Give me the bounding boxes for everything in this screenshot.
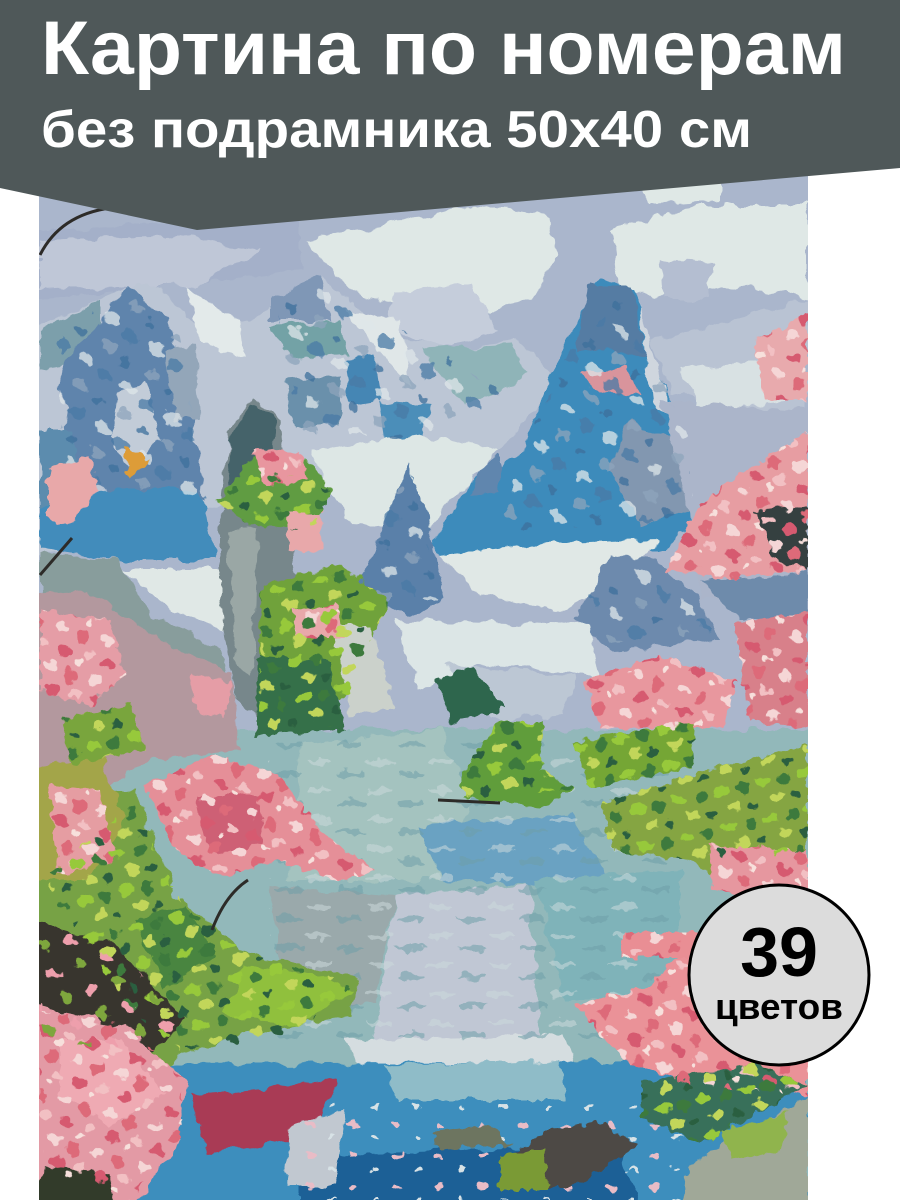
main right peak: [432, 278, 700, 555]
branch strokes: [40, 208, 500, 930]
badge: 39 colours: цветов: [715, 986, 843, 1027]
distant mountains: [30, 275, 560, 560]
rocks in the water: [430, 1122, 638, 1190]
badge: 39 colours: 39: [740, 913, 818, 991]
painting: mountain lake with blossoms: [30, 176, 820, 1200]
blossom brushwork texture: [40, 315, 808, 1200]
left bank foliage: [30, 590, 360, 1200]
header banner: [0, 0, 900, 230]
foliage brushwork texture: [45, 470, 808, 1145]
title: Картина по номерам: [41, 6, 846, 91]
dark rock with blossom dabs: [40, 925, 180, 1045]
mid clouds and middle peaks: [40, 400, 808, 720]
pink blossom masses: [40, 445, 375, 1125]
badge: 39 colours: [689, 885, 869, 1065]
mountain brushwork texture: [60, 285, 715, 645]
rock pillar: [220, 398, 300, 720]
green island on pillar with blossom: [218, 448, 505, 735]
water ripple texture: [270, 740, 680, 1200]
lake water: [110, 725, 808, 1200]
right bank blossoms and foliage: [462, 315, 808, 1200]
subtitle: без подрамника 50х40 см: [41, 101, 752, 159]
sky and clouds: [30, 178, 808, 420]
